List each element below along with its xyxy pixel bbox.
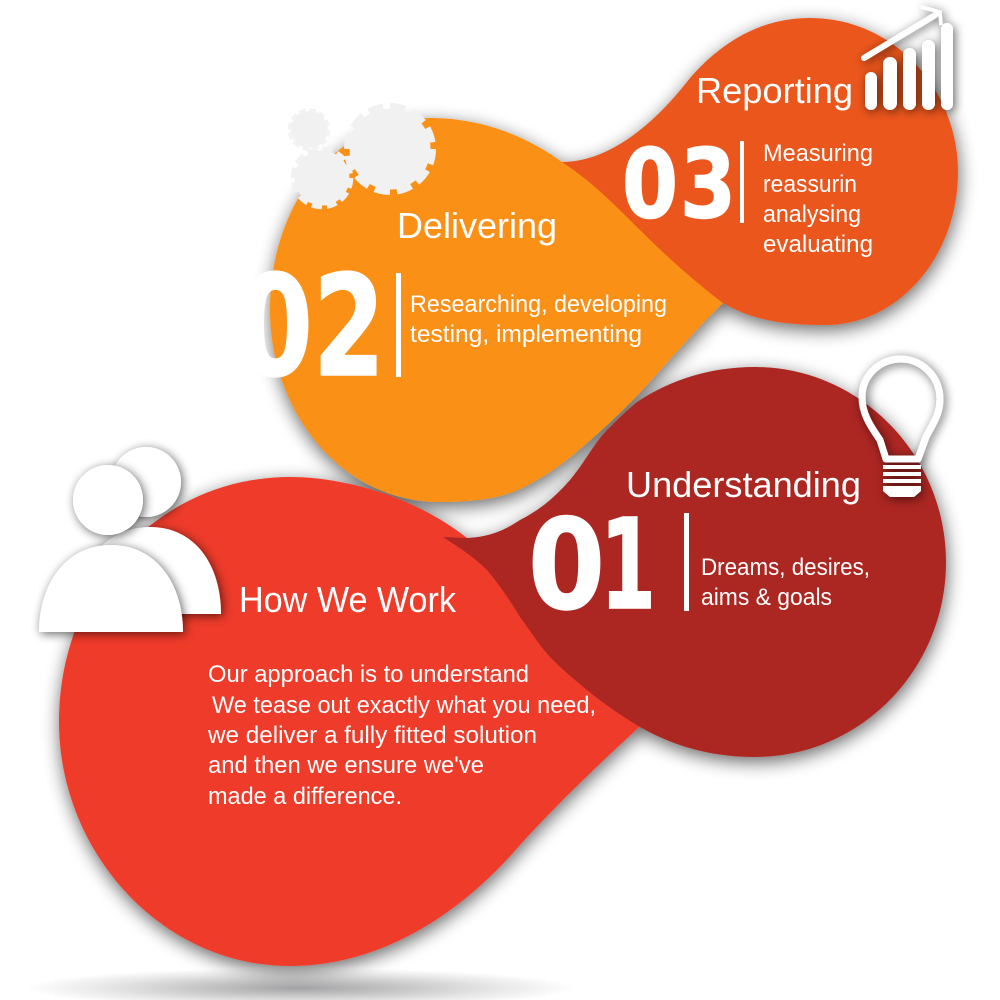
text: approach paragraph: and then we ensure we've: [208, 752, 484, 779]
number 03: 0: [622, 130, 678, 240]
text: delivering list: testing, implementing: [410, 321, 642, 348]
text: understanding list: [701, 554, 870, 611]
text: delivering list: Researching, developing: [410, 291, 667, 318]
number 01: [528, 493, 656, 638]
number 02: [238, 246, 385, 409]
text: reporting list: evaluating: [763, 231, 873, 258]
icon: people: [39, 447, 221, 632]
panel: how we work: [59, 477, 650, 966]
text: understanding list: aims & goals: [701, 584, 832, 611]
text: approach paragraph: We tease out exactly what you need,: [212, 692, 596, 719]
panel: delivering: [270, 118, 723, 502]
heading: how we work: How We Work: [239, 579, 457, 620]
number 02: 2: [313, 246, 385, 409]
text: approach paragraph: made a difference.: [208, 783, 402, 810]
text: approach paragraph: [207, 661, 596, 810]
text: reporting list: Measuring: [763, 140, 873, 167]
number 02: 0: [238, 246, 313, 409]
text: understanding list: Dreams, desires,: [701, 554, 870, 581]
ground shadow: [25, 968, 575, 1000]
number 03: 3: [680, 130, 736, 240]
text: approach paragraph: we deliver a fully fitted solution: [207, 722, 537, 749]
heading: delivering: Delivering: [397, 205, 557, 246]
divider 01: [684, 513, 689, 611]
number 01: 0: [528, 493, 605, 638]
number 01: 1: [600, 493, 656, 638]
panel: reporting: [562, 18, 958, 325]
text: reporting list: reassurin: [763, 171, 857, 198]
number 03: [622, 130, 736, 240]
text: reporting list: analysing: [763, 201, 861, 228]
panel: understanding: [443, 367, 946, 757]
heading: reporting: Reporting: [696, 70, 853, 111]
text: reporting list: [763, 140, 873, 258]
divider 03: [740, 141, 744, 223]
icon: gears: [290, 106, 433, 207]
text: delivering list: [410, 291, 667, 348]
divider 02: [396, 273, 401, 377]
heading: understanding: Understanding: [626, 464, 861, 505]
icon: bar chart with arrow: [864, 7, 953, 110]
icon: light bulb: [862, 359, 940, 497]
text: approach paragraph: Our approach is to understand: [208, 661, 529, 688]
